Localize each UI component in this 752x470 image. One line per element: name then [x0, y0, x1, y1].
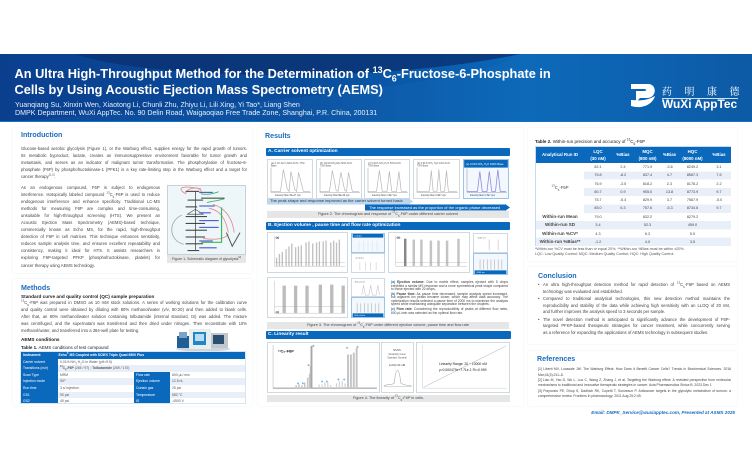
text: introduction paragraph 2: reduces sample analysis time, and ensures excellent repeatability and: [21, 241, 160, 246]
chart: LLOQ peak: LLOQ 20 nM: [389, 363, 406, 367]
bullet 1: •: [538, 282, 539, 287]
section A bar: A. Carrier solvent optimization: [268, 149, 338, 154]
table 2 data: HQC: 8734.6: [687, 206, 698, 210]
authors and affiliation: DMPK Department, WuXi AppTec. No. 90 Delin Road, Waigaoqiao Free Trade Zone, Shanghai, P.R. China, 200131: [15, 109, 377, 117]
table 2 data: MQC bias: 13.8: [666, 190, 673, 194]
heading: methods: Methods: [21, 284, 50, 292]
table 2 data: LQC bias: 0.9: [620, 190, 626, 194]
bullet 2: •: [538, 296, 539, 301]
text: optimization notes: (a) Ejection volume: Due to matrix effect, samples ejected with 5 drops exhibited a similar MS response and a more symmetrical peak shape compared to those ejected with 20 drops. (b) Pause time: As pause time decreased, sample analysis speed increased, but adjacent ion peaks became closer, which may affect data accuracy. The optimization results selected a pause time of 2000 ms to maximize the analysis speed while maintaining adequate separation between the droplets. (c) Flow rate: Considering the reproducibility of peaks at different flow rates, 600 μL/min was selected as the optimal flow rate.: [391, 280, 508, 315]
text: introduction paragraph 2: detection of F6P in cell matrices. This technique enhances sensitivity,: [21, 234, 160, 239]
authors and affiliation: Yuanqiang Su, Xinxin Wen, Xiaotong Li, Chunli Zhu, Zhiyu Li, Lili Xing, Yi Tao*, Liang Shen: [15, 101, 300, 109]
table 2 summary HQC: 8279.2: [687, 215, 698, 219]
table 1 labels: Run time: [23, 386, 37, 390]
arrow: response increase: [365, 204, 510, 211]
table 2 summary labels: Within-run Mean: [542, 214, 578, 219]
table 2 data: MQC: [643, 165, 652, 210]
table 2 summary labels: Within-run %CV*: [542, 230, 578, 236]
chart: chromatogram b: (b) 10mM NH₄OAc 50% ACN: [320, 162, 352, 165]
bullet 1: technology was evaluated and established.: [543, 289, 623, 294]
text: introduction paragraph 2: interference. Isotopically labeled compound 13C6-F6P is used to reduce: [21, 190, 160, 198]
row fill 5: [58, 378, 245, 385]
column: LQC bias: %Bias: [616, 152, 630, 157]
table 1 second values: 25 psi: [172, 386, 181, 390]
chart: chromatogram d: 75% Base: [417, 165, 429, 168]
column: run id: [536, 152, 584, 158]
table 2 summary LQC: -1.2: [595, 240, 601, 244]
bullet 1: An ultra high-throughput detection method for rapid detection of 13C6-F6P based on AEMS: [543, 281, 730, 289]
table 2 data: MQC: 837.4: [643, 173, 652, 177]
table 1 labels: GS1: [23, 393, 30, 397]
figure 2 caption: [267, 211, 509, 218]
table 1 labels: Transitions (m/z): [23, 366, 48, 370]
table 1 values: 90 psi: [60, 393, 69, 397]
panel: introduction: [13, 128, 252, 273]
table 1 second values: [172, 373, 190, 403]
column: MQC: (800 nM): [639, 156, 656, 160]
table 1 labels: Injection mode: [23, 379, 45, 383]
bullet 3: The novel detection method is anticipated to significantly advance the development of F6P-: [543, 316, 730, 322]
panel: methods: [13, 279, 252, 406]
chart: ejection volume bars: [267, 232, 348, 273]
section C bar: [266, 331, 511, 339]
header banner: [0, 54, 752, 122]
text: introduction paragraph 2: consistency, making it ideal for HTS. It assists researchers in: [21, 248, 160, 253]
chart: LLOQ peak: Standard, Nominal: [387, 357, 407, 360]
table 2 data: HQC: 8773.9: [687, 190, 698, 194]
chart: chromatogram c: (c) 0.01% NH₃·H₂O 50% ACN: [368, 162, 401, 165]
table 2 row stripes: [584, 163, 731, 213]
chart: flow rate chromatogram bottom highlighted: 600 μL/min: [354, 315, 366, 317]
bullet 2: and further improves the analysis speed to 3 seconds per sample.: [543, 309, 665, 314]
table 1 values: 45 psi: [60, 399, 69, 403]
table 2 footnote: [535, 246, 685, 256]
text: introduction paragraph 2: unsuitable for high-throughput screening (HTS). We present an: [21, 213, 160, 218]
table 2 data: LQC bias: -3.5: [620, 182, 626, 186]
table 2 data: LQC: 82.1: [594, 165, 602, 169]
chart: flow rate chromatogram bottom highlighted: [351, 297, 385, 318]
table 1 second labels: IS: [136, 399, 139, 403]
bullet 3: targeted PFKP-based therapeutic strategies for cancer treatment, while concurrently serving: [543, 323, 730, 328]
chart: pause time bars: (b): [397, 236, 400, 240]
column: HQC: (8000 nM): [682, 156, 703, 160]
text: introduction paragraph 2: As an endogenous compound, F6P is subject to endogenous: [21, 184, 160, 190]
text: methods paragraph: [21, 298, 247, 333]
table 2 data: LQC bias: -8.2: [620, 173, 626, 177]
chart: chromatogram a: Base: [271, 165, 277, 168]
table 2 summary stripes: [536, 213, 731, 246]
labels column: [21, 359, 58, 403]
table 2: [535, 146, 731, 246]
bullet 3: as a reference for expanding the applications of AEMS technology in subsequent studies.: [543, 330, 708, 335]
column: run id: Analytical Run ID: [542, 152, 578, 157]
text: methods paragraph: After that, an 80% methanol/water solution containing tolbutamide (internal standard, IS) was added. The mixture: [21, 314, 247, 318]
text: methods paragraph: 13C6-F6P was prepared in DMSO as 10 mM stock solutions. A series of working solutions for the calibration curve: [21, 298, 247, 306]
label: response arrow: The response increased as the proportion of the organic phase decreased: [369, 205, 500, 210]
text: introduction paragraph 2: exploring F6P-targeted PFKP (phosphofructokinase, platelet) for: [21, 255, 160, 260]
text: introduction paragraph 2: Acoustic Ejection Mass Spectrometry (AEMS)-based technique,: [21, 220, 160, 225]
table 2 data: MQC bias: 4.7: [667, 173, 672, 177]
text: introduction paragraph 2: cancer therapy using AEMS technology.: [21, 263, 95, 268]
reference list: [1] Liberti MV, Locasale JW. The Warburg Effect: How Does it Benefit Cancer Cells? Trends in Biochemical Sciences. 2016 [2] Liao M, Yao D, Wu L, Luo C, Wang Z, Zhang J, et al. Targeting the Warburg effect: A revisited perspective from molecular [3] Porporato PE, Dhup S, Dadhich RK, Copetti T, Sonveaux P. Anticancer targets in the glycolytic metabolism of tumors: a: [538, 367, 731, 393]
chart: ejection volume chromatogram top: [351, 233, 385, 253]
reference list: comprehensive review. Frontiers in pharmacology. 2011 Aug 25;2:49.: [538, 394, 642, 398]
table 2 footnote: *Within-run %CV must be less than or equal 20%. **Within-run %Bias must be within ±20%.: [535, 246, 685, 250]
chart: chromatogram a: [267, 159, 313, 199]
bullet 2: [538, 296, 730, 314]
table 1 labels: Carrier solvent: [23, 360, 45, 364]
chart: chromatogram b: 75% Base: [320, 165, 332, 168]
chart: linearity peaks: [267, 342, 380, 393]
chart: chromatogram d: [413, 159, 460, 199]
row fill 3: [58, 365, 245, 372]
heading: introduction: Introduction: [21, 131, 62, 139]
chart: pause time chromatogram bottom highlighted: 2000 ms: [476, 272, 485, 274]
table 2 title: Table 2. Within-run precision and accuracy of 13C6-F6P: [535, 138, 645, 146]
table title: Table 1. AEMS conditions of test compound: [21, 344, 108, 350]
table 2 data: MQC: 757.6: [643, 206, 652, 210]
chart: ejection volume chromatogram bottom: 20 drops: [355, 257, 364, 260]
conclusion bullets: [538, 281, 730, 335]
second labels column: [134, 372, 170, 403]
table 2 footnote: LQC: Low Quality Control; MQC: Medium Quality Control; HQC: High Quality Control.: [535, 252, 674, 256]
chart: chromatogram d: Intensity Max:1.5E7 cps: [421, 194, 447, 197]
column: LQC: (30 nM): [590, 156, 606, 160]
table 2 summary HQC: 3.5: [690, 240, 695, 244]
chart: pause time chromatogram bottom highlighted: [473, 253, 508, 275]
chart: chromatogram e highlighted: (e) 0.01% NH₃·H₂O 100% Base: [466, 162, 504, 166]
chart: ejection volume bars: (a): [276, 236, 279, 240]
column: LQC: LQC: [593, 149, 603, 154]
table 2 data: HQC bias: 2.2: [716, 182, 722, 186]
figure 3 caption: Figure 3. The chromogram of 13 C 6-F6P under different ejection volume, pause time and flow rate: [307, 322, 469, 329]
label: analyte: 13C6-F6P: [551, 184, 568, 192]
table 1 second values: 550 °C: [172, 393, 182, 397]
reference list: Mar;41(3):211–8.: [538, 373, 564, 377]
chart: chromatogram c: Intensity Max:1.3E7 cps: [372, 194, 398, 197]
title: An Ultra High-Throughput Method for the Determination of 13C6-Fructose-6-Phosphate in: [14, 65, 551, 84]
footer: contact email: Email: DMPK_Service@wuxiapptec.com, Presented at ASMS 2025: [591, 410, 735, 414]
table 2 data: HQC bias: 9.7: [716, 206, 722, 210]
text: introduction paragraph 2: methods for measuring F6P are complex and time-consuming,: [21, 206, 160, 211]
chart: chromatogram c: [364, 159, 410, 199]
table 2 summary labels: Within-run %Bias**: [540, 239, 580, 244]
bullet 3: •: [538, 316, 539, 322]
chart: ejection volume chromatogram top: 5 drops: [354, 235, 362, 238]
table 2 summary MQC: 832.2: [643, 215, 652, 219]
chart: calibration curve: y=0.000479x+7.71e-1 R²=0.999: [439, 368, 487, 372]
row fill 7: [58, 392, 245, 398]
column: MQC: [634, 149, 661, 162]
chart: chromatogram b: [316, 159, 362, 199]
table 2 data: MQC: 818.2: [643, 182, 652, 186]
table 1 values: [60, 360, 130, 403]
table 2 data: HQC bias: 7.5: [716, 173, 722, 177]
chart: flow rate bars: [267, 277, 348, 318]
bullet 3: [538, 316, 730, 335]
text: methods paragraph: methanol/water, and transferred into a 384-well plate for testing.: [21, 328, 139, 332]
table 1 values: SIP: [60, 379, 65, 383]
logo: WuXi AppTec: 药明康德: [662, 82, 752, 98]
table 2 header: [536, 147, 731, 163]
chart: flow rate bars: (c): [276, 310, 279, 314]
text: introduction paragraph 1: Glucose-based aerobic glycolysis (Figure 1), or the Warburg effect, supplies energy for the rapid growth of tumors.: [21, 146, 247, 150]
chart: pause time chromatogram top: [473, 233, 508, 253]
table 2 summary LQC: 3.4: [595, 223, 601, 227]
chart: pause time bars: [388, 232, 470, 273]
label: peak shape arrow: The peak shape and response improved as the carrier solvent turned basic: [270, 198, 403, 203]
text: introduction paragraph 1: [21, 146, 247, 179]
figure 1 caption: Figure 1. Schematic diagram of glycolysis[2]: [172, 256, 241, 261]
table 2 data: LQC bias: -5.4: [620, 198, 626, 202]
chart: chromatogram e highlighted: Intensity Max:1.7E7 cps: [470, 194, 496, 197]
heading: results: Results: [265, 132, 291, 140]
heading: conclusion: Conclusion: [538, 272, 577, 280]
chart: chromatogram e highlighted: [463, 159, 509, 199]
chart: pause time chromatogram top: 5000 ms: [477, 238, 486, 240]
logo: WuXi AppTec: [631, 82, 752, 111]
table 2 data: LQC: 85.0: [594, 206, 602, 210]
table 2 data: HQC bias: -5.0: [716, 198, 722, 202]
logo: WuXi AppTec: WuXi AppTec: [662, 97, 737, 111]
chart: calibration curve: [416, 342, 510, 393]
table 1 labels: Scan Type: [23, 373, 39, 377]
table 1 second labels: [136, 373, 160, 403]
chart: flow rate chromatogram top: 300 μL/min: [355, 282, 366, 284]
table 2 data: HQC: 8249.2: [687, 165, 698, 169]
text: introduction paragraph 1: Its metabolic byproduct, lactate, creates an immunosuppressive environment favorable for tumor growth and: [21, 152, 247, 158]
bullet 1: [538, 281, 730, 294]
figure 3 caption: [267, 322, 509, 329]
chart: chromatogram a: Intensity Max:7E+07 cps: [275, 194, 301, 197]
column: HQC: [678, 149, 707, 162]
table 2 data: MQC bias: -3.6: [666, 165, 673, 169]
column: MQC bias: [661, 152, 678, 158]
chart: glycolysis schematic: [167, 185, 246, 255]
figure 2 caption: Figure 2. The chromogram and response of 13 C 6-F6P under different carrier solvent: [318, 211, 458, 218]
row: instrument: Instrument Echo® MS Coupled with SCIEX Triple Quad 6500 Plus: [23, 352, 144, 357]
chart: flow rate chromatogram top: [351, 278, 385, 297]
table 2 summary LQC: 79.0: [594, 215, 602, 219]
text: introduction paragraph 2: commercially known as Echo MS, for the rapid, high-throughput: [21, 227, 160, 232]
chart: LLOQ peak: Sensitivity Curve: [388, 353, 406, 356]
subheading: sample preparation: Standard curve and quality control (QC) sample preparation: [21, 294, 154, 298]
table 2 data: LQC bias: 2.4: [620, 165, 626, 169]
panel: references: [528, 351, 737, 406]
figure 4 caption: Figure 4. The linearity of 13 C 6-F6P in cells.: [353, 395, 424, 402]
table 2 summary HQC: 5.5: [690, 232, 695, 236]
table 2 data: HQC: 8567.3: [687, 173, 698, 177]
chart: ejection volume chromatogram bottom: [351, 253, 385, 273]
chart: chromatogram a: (a) 0.1% FA in 50% ACN / 75%: [271, 162, 305, 165]
table 1 second labels: Temperature: [136, 393, 155, 397]
column: HQC: HQC: [688, 149, 697, 154]
text: introduction paragraph 1: phosphate (F6P) by phosphofructokinase-1 (PFK1) is a key rate-limiting step in the Warburg effect and a target for: [21, 166, 247, 172]
table 2 data: MQC bias: 3.7: [667, 198, 672, 202]
table 2 data: MQC bias: 2.3: [667, 182, 672, 186]
table 1 second values: 600 μL/ min: [172, 373, 190, 377]
table 1 second labels: Curtain gas: [136, 386, 153, 390]
text: introduction paragraph 1: cancer therapy[1,2].: [21, 172, 56, 178]
table 2 data: HQC bias: 9.7: [716, 190, 722, 194]
chart: LLOQ peak: [381, 342, 414, 393]
table 1 second values: 12.5 nL: [172, 379, 183, 383]
column: LQC: [584, 149, 612, 162]
table 1 labels: GS2: [23, 399, 30, 403]
text: methods paragraph: and quality control were obtained by diluting with 80% methanol/water (v/v, 80:20) and then added to blank cells.: [21, 306, 247, 312]
table 2 summary labels: Within-run SD: [545, 222, 575, 227]
table 1 second values: -4500 V: [172, 399, 184, 403]
table 2 summary HQC: [687, 215, 698, 244]
table 2 data: HQC bias: [716, 165, 722, 210]
table 2 summary MQC: [643, 215, 652, 244]
table 2 summary MQC: 52.3: [644, 223, 651, 227]
table 2 data: MQC bias: [666, 165, 673, 210]
table 2 data: LQC bias: [620, 165, 626, 210]
table 2 data: LQC bias: 6.3: [620, 206, 626, 210]
column: HQC bias: [707, 152, 731, 158]
text: introduction paragraph 2: endogenous interference and enhance specificity. Traditional LC-MS: [21, 199, 160, 204]
table 2 data: MQC bias: -5.3: [666, 206, 673, 210]
section B bar: [266, 222, 510, 230]
section A bar: [266, 148, 510, 156]
table 1 values: MRM: [60, 373, 68, 377]
table 2 summary MQC: 6.3: [645, 232, 650, 236]
chart: LLOQ peak: MS/MS: [393, 350, 401, 352]
figure 1 caption: [167, 255, 246, 263]
text: introduction paragraph 2: [21, 184, 160, 268]
subheading: AEMS conditions: AEMS conditions: [21, 336, 60, 342]
chart: chromatogram b: Intensity Max:9E+06 cps: [324, 194, 350, 197]
table 2 summary MQC: 4.0: [645, 240, 650, 244]
text: introduction paragraph 1: metastasis, and serves as an indicator of malignant tumor transformation. The phosphorylation of fructose-6-: [21, 160, 247, 164]
table 2 data: LQC: [594, 165, 602, 210]
table 2 data: HQC: 7567.9: [687, 198, 698, 202]
bullet 2: Compared to traditional analytical technologies, this new detection method maintains the: [543, 296, 730, 301]
chart: calibration curve: Linearity Range: 20 ~ 10000 nM: [439, 362, 487, 366]
table 1: [20, 351, 246, 404]
table 1 second labels: Ejection volume: [136, 379, 160, 383]
column: LQC bias: [612, 152, 634, 158]
panel: conclusion: [528, 267, 737, 344]
table 1 labels: [23, 360, 48, 403]
title: [14, 65, 551, 97]
table 2 data: LQC: 75.8: [594, 173, 602, 177]
chart: chromatogram c: 75% Base: [368, 165, 380, 168]
table 2 summary HQC: 459.0: [688, 223, 697, 227]
arrow: peak shape: [267, 198, 413, 204]
chart: chromatogram d: (d) 0.01% NH₃·H₂O 10% ACN: [417, 162, 450, 165]
bullet 2: reproducibility and stability of the data while achieving high sensitivity with an LLOQ of 20 nM,: [543, 302, 730, 308]
section C bar: C. Linearity result: [268, 332, 309, 337]
table 1 values: 0.01% NH 3·H 2O in Water (pH=9.5): [60, 360, 112, 365]
column: MQC bias: %Bias: [663, 152, 676, 157]
reference list: mechanisms to traditional and innovative therapeutic strategies in cancer. Acta Pharmaceutica Sinica B. 2023 Dec 1: [538, 383, 712, 387]
table 2 summary LQC: [594, 215, 602, 244]
table 2 data: MQC: 905.0: [643, 190, 652, 194]
table 2 data: LQC: 80.7: [594, 190, 602, 194]
authors and affiliation: [15, 101, 377, 117]
panel: table 2: [528, 128, 737, 261]
table 2 data: LQC: 76.9: [594, 182, 602, 186]
table 2 summary LQC: 4.3: [595, 232, 601, 236]
table 2 data: LQC: 75.7: [594, 198, 602, 202]
row: instrument: [21, 352, 245, 359]
table 1 values: 13 C 6-F6P (265 / 97) ; Tolbutamide (269 / 170): [60, 365, 129, 372]
table 1 values: 3 s/ injection: [60, 386, 79, 390]
section B bar: B. Ejection volume , pause time and flow rate optimization: [268, 223, 400, 228]
title: Cells by Using Acoustic Ejection Mass Spectrometry (AEMS): [14, 82, 383, 97]
table 2 data: MQC: 829.9: [643, 198, 652, 202]
table 1 second labels: Flow rate: [136, 373, 150, 377]
table 2 data: MQC: 771.9: [643, 165, 652, 169]
figure 4 caption: [267, 395, 510, 402]
panel: results: [258, 128, 523, 406]
heading: references: References: [537, 355, 575, 363]
column: MQC: MQC: [642, 149, 653, 154]
text: methods paragraph: was centrifuged, and the supernatant was transferred and then dried under nitrogen. Then reconstitute with 10%: [21, 320, 247, 326]
table 2 data: HQC: 8178.2: [687, 182, 698, 186]
icon: instrument: [176, 329, 230, 351]
table 2 summary labels: [540, 214, 580, 244]
chart: linearity peaks: ¹³C₆-F6P: [278, 349, 294, 354]
column: HQC bias: %Bias: [712, 152, 726, 157]
table 2 data: HQC: [687, 165, 698, 210]
table 2 data: HQC bias: 3.1: [716, 165, 722, 169]
